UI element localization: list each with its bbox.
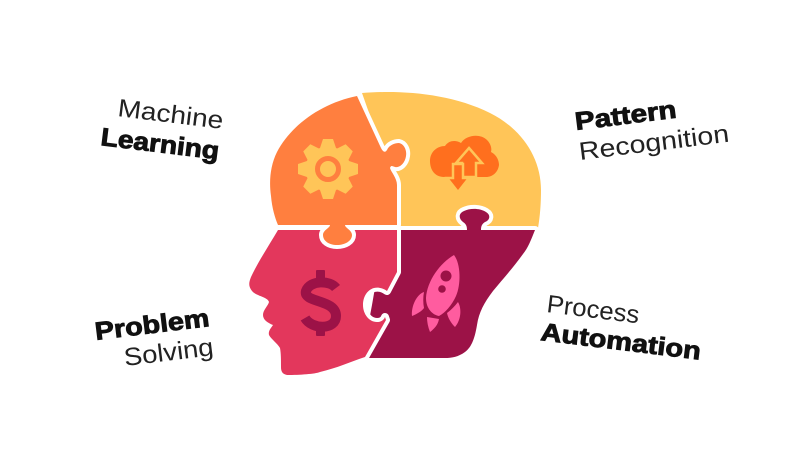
label: Process Automation [539, 290, 702, 366]
label: Problem Solving: Solving [122, 333, 215, 372]
label: Problem Solving [93, 304, 215, 372]
label: Problem Solving: Problem [93, 304, 211, 346]
label: Machine Learning [99, 94, 225, 165]
puzzle piece: red face [249, 230, 397, 375]
puzzle piece: maroon [362, 209, 535, 358]
label: Machine Learning: Machine [116, 94, 225, 135]
puzzle piece: yellow [362, 92, 541, 228]
label: Pattern Recognition: Pattern [573, 96, 678, 136]
icon: gear [298, 139, 358, 199]
icon: cloud with up and down arrows [430, 136, 499, 192]
label: Process Automation: Process [545, 290, 641, 329]
label: Process Automation: Automation [539, 318, 702, 366]
puzzle piece: orange [270, 96, 406, 245]
icon: dollar sign [305, 270, 336, 336]
label: Machine Learning: Learning [99, 123, 221, 165]
head puzzle [249, 92, 541, 375]
label: Pattern Recognition [573, 96, 731, 166]
label: Pattern Recognition: Recognition [577, 120, 731, 166]
icon: rocket [412, 255, 460, 332]
